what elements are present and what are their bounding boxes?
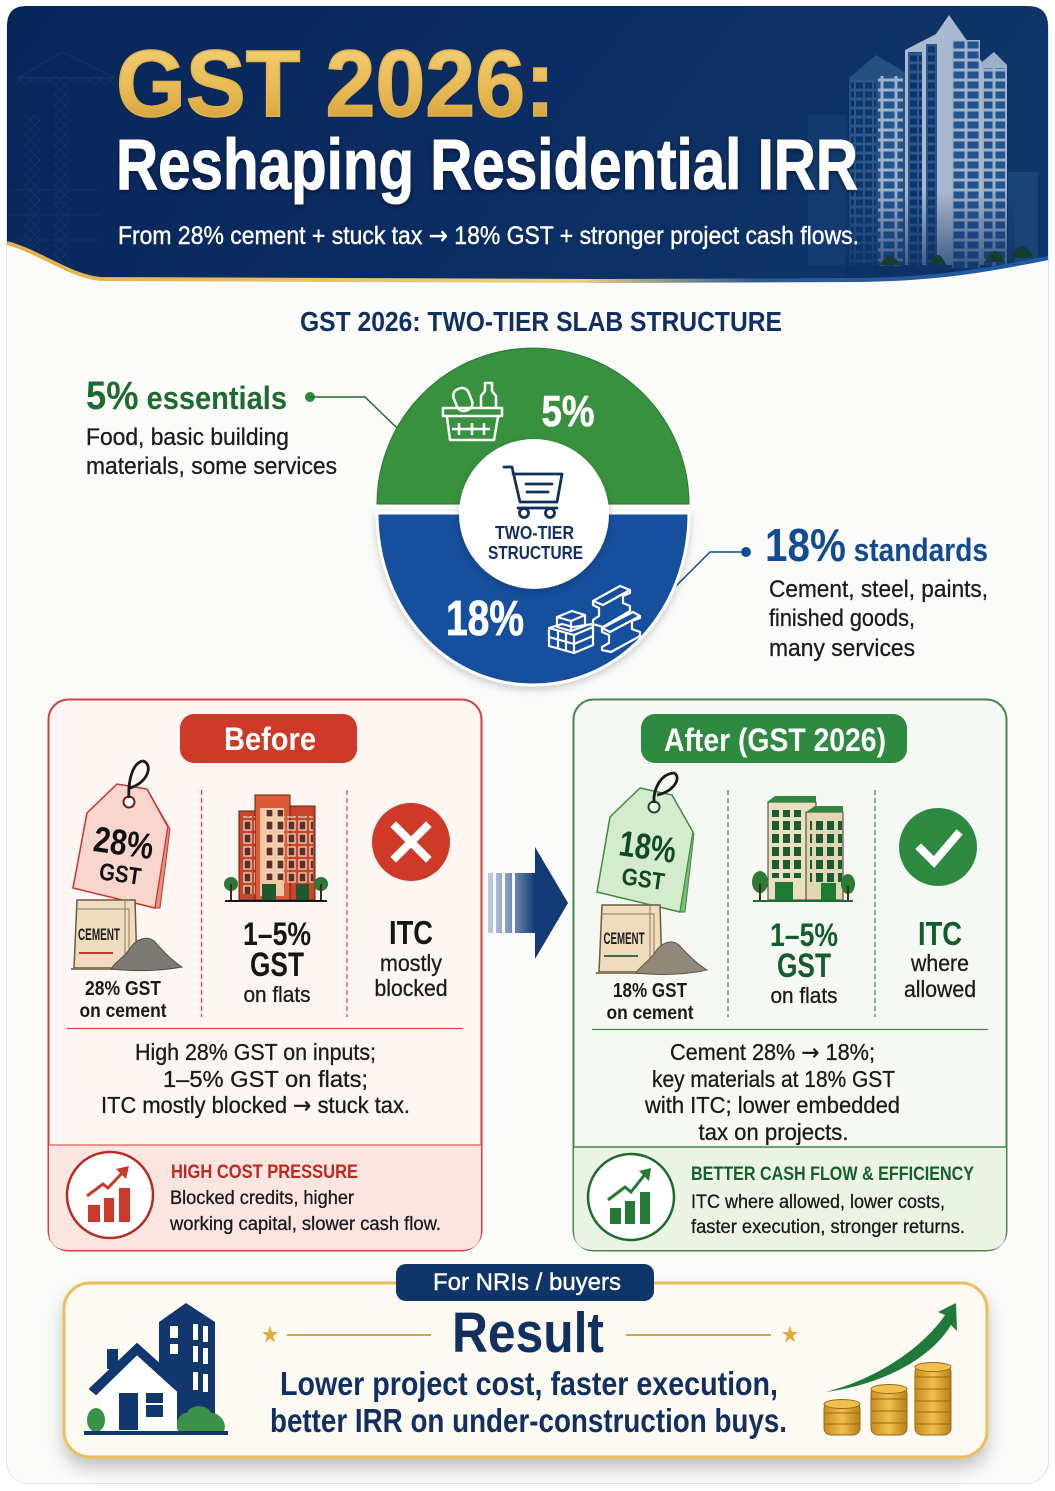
segment: 18% blue xyxy=(377,513,689,685)
text: before summary: 1–5% GST on flats; xyxy=(163,1066,368,1092)
label: ITC mostly blocked: mostly xyxy=(380,950,442,976)
label: 28% GST on cement: on cement xyxy=(80,1001,167,1022)
band: better cash flow: faster execution, stronger returns. xyxy=(691,1217,965,1238)
callout: 18% standards: Cement, steel, paints, xyxy=(769,576,988,603)
label: ITC where allowed: ITC xyxy=(918,915,962,952)
badge: before xyxy=(180,714,357,763)
panel: result xyxy=(64,1264,987,1457)
arrow: before to after xyxy=(488,847,568,959)
label: 1-5% GST on flats: GST xyxy=(777,947,831,985)
band: high cost pressure: Blocked credits, higher xyxy=(170,1188,355,1209)
label: 18% GST on cement xyxy=(606,980,694,1024)
label: 1-5% GST on flats: GST xyxy=(250,946,304,984)
centre circle: TWO-TIER xyxy=(495,523,574,543)
icon: rising chart green xyxy=(588,1154,674,1240)
label: ITC mostly blocked: ITC xyxy=(389,914,433,951)
callout: 5% essentials: Food, basic building xyxy=(86,424,289,451)
title: GST 2026: xyxy=(116,31,555,137)
band: high cost pressure xyxy=(49,1145,481,1250)
section heading: GST 2026: TWO-TIER SLAB STRUCTURE xyxy=(300,306,782,337)
icon: cement bag xyxy=(596,904,707,974)
callout: 5% essentials: 5% essentials xyxy=(86,374,287,418)
icon: 18% price tag xyxy=(597,773,694,912)
icon: 18% price tag: 18% xyxy=(617,822,679,871)
icon: red apartment building xyxy=(224,795,328,901)
text: result statement: better IRR on under-construction buys. xyxy=(270,1402,787,1439)
callout: 5% essentials xyxy=(86,374,398,480)
icon: 28% price tag: GST xyxy=(97,858,143,891)
centre circle: STRUCTURE xyxy=(488,543,583,563)
label: 1-5% GST on flats: 1–5% xyxy=(243,916,311,952)
panel: after xyxy=(574,700,1006,1250)
heading: result with ornaments xyxy=(262,1301,798,1365)
label: ITC where allowed: allowed xyxy=(904,976,976,1002)
label: 1-5% GST on flats: 1–5% xyxy=(770,917,838,953)
title xyxy=(116,31,858,205)
callout: 18% standards xyxy=(676,519,988,662)
badge: for NRIs / buyers: For NRIs / buyers xyxy=(433,1269,621,1296)
label: 18% GST on cement: on cement xyxy=(606,1003,694,1024)
heading: result with ornaments: Result xyxy=(452,1301,604,1365)
label: 18% GST on cement: 18% GST xyxy=(613,980,687,1002)
residential towers xyxy=(808,15,1038,280)
callout: 18% standards: many services xyxy=(769,635,915,662)
badge: after: After (GST 2026) xyxy=(664,722,886,758)
label: 28% GST on cement xyxy=(80,978,167,1022)
badge: after xyxy=(641,714,907,763)
divider lines xyxy=(202,790,347,1017)
panel: before xyxy=(48,700,482,1250)
text: after summary xyxy=(644,1039,900,1145)
text: result statement xyxy=(270,1365,787,1439)
header banner xyxy=(7,6,1048,281)
text: before summary xyxy=(101,1039,410,1119)
icon: 28% price tag: 28% xyxy=(91,818,156,867)
badge: before: Before xyxy=(224,721,316,757)
text: before summary: High 28% GST on inputs; xyxy=(135,1039,376,1065)
divider lines xyxy=(728,790,875,1017)
band: better cash flow: BETTER CASH FLOW & EFFICIENCY xyxy=(691,1164,974,1185)
label: ITC mostly blocked xyxy=(374,914,448,1001)
icon: 18% price tag: GST xyxy=(620,863,666,896)
text: after summary: tax on projects. xyxy=(698,1119,848,1145)
two-tier donut chart xyxy=(377,348,689,685)
icon: shopping cart xyxy=(504,467,562,518)
text: after summary: with ITC; lower embedded xyxy=(644,1092,900,1118)
icon: rising chart red xyxy=(67,1152,153,1238)
crane and scaffold silhouette xyxy=(10,52,115,265)
icon: house and tower xyxy=(84,1303,228,1433)
text: result statement: Lower project cost, faster execution, xyxy=(280,1365,778,1402)
icon: cement bag: CEMENT xyxy=(78,925,120,944)
callout: 18% standards: finished goods, xyxy=(769,605,915,632)
icon: coins and rising arrow xyxy=(824,1303,957,1435)
icon: green apartment building xyxy=(752,796,855,901)
label: 1-5% GST on flats: on flats xyxy=(244,982,310,1007)
band: high cost pressure: HIGH COST PRESSURE xyxy=(171,1162,358,1183)
label: 28% GST on cement: 28% GST xyxy=(85,978,161,1000)
badge: for NRIs / buyers xyxy=(396,1264,654,1301)
label: ITC where allowed: where xyxy=(910,950,969,976)
callout: 18% standards: 18% standards xyxy=(765,519,988,571)
band: better cash flow xyxy=(574,1147,1006,1250)
label: 18%: 18% xyxy=(446,592,524,646)
icon: bricks and steel beams xyxy=(549,586,640,653)
label: 1-5% GST on flats: on flats xyxy=(770,983,838,1008)
callout: 5% essentials: materials, some services xyxy=(86,453,337,480)
label: 1-5% GST on flats xyxy=(770,917,838,1008)
band: high cost pressure: working capital, slower cash flow. xyxy=(169,1214,441,1235)
icon: 28% price tag xyxy=(73,761,170,908)
text: after summary: key materials at 18% GST xyxy=(652,1066,895,1092)
icon: cement bag: CEMENT xyxy=(604,929,645,948)
icon: cement bag xyxy=(71,899,182,971)
icon: cross mark xyxy=(372,803,450,881)
icon: check mark xyxy=(899,808,977,886)
label: 1-5% GST on flats xyxy=(243,916,311,1007)
label: ITC mostly blocked: blocked xyxy=(374,975,448,1001)
text: after summary: Cement 28% → 18%; xyxy=(670,1039,875,1066)
band: better cash flow: ITC where allowed, lower costs, xyxy=(691,1192,945,1213)
text: before summary: ITC mostly blocked → stuck tax. xyxy=(101,1092,410,1119)
centre circle xyxy=(459,439,609,589)
icon: grocery basket xyxy=(443,383,502,440)
label: ITC where allowed xyxy=(904,915,976,1002)
label: 5%: 5% xyxy=(542,387,594,436)
title: Reshaping Residential IRR xyxy=(116,126,858,205)
subtitle: From 28% cement + stuck tax → 18% GST + stronger project cash flows. xyxy=(118,221,859,250)
segment: 5% green xyxy=(377,348,689,504)
